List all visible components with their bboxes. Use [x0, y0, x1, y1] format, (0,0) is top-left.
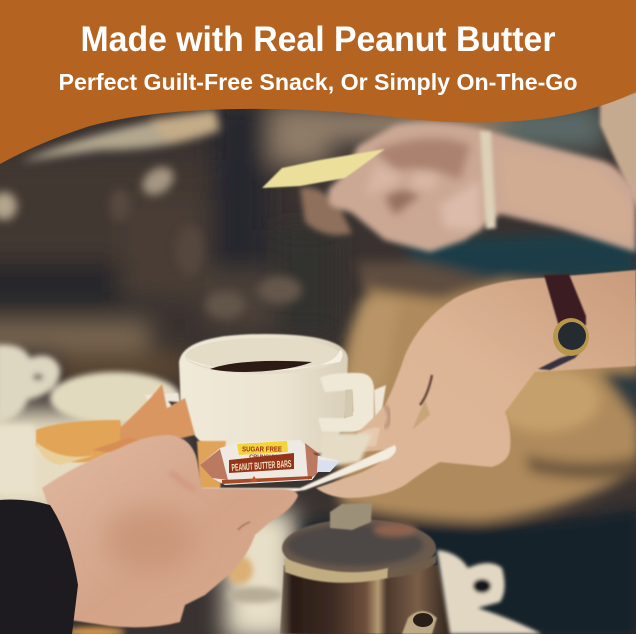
peanut butter bar wrapper — [200, 440, 340, 485]
label: sugar free — [237, 441, 288, 455]
teapot lid knob — [330, 503, 372, 530]
blurred lower table items — [65, 556, 283, 634]
wristwatch — [538, 274, 589, 370]
blurred plate, top left — [20, 110, 220, 162]
title: Made with Real Peanut Butter — [80, 20, 556, 59]
foreground hand — [42, 435, 298, 627]
pastries on plate — [36, 384, 226, 490]
teapot — [280, 503, 452, 634]
peanut butter bar wrapper: SUGAR FREE — [242, 444, 282, 454]
upper hand holding card — [262, 122, 636, 252]
saucer — [190, 445, 396, 496]
small cup behind teapot — [437, 550, 542, 634]
napkin tip — [374, 385, 386, 420]
orange wave banner — [0, 0, 636, 164]
thumbnail — [358, 428, 380, 447]
torso and apron — [300, 232, 636, 634]
label: peanut butter bars: PEANUT BUTTER BARS — [231, 459, 292, 474]
coffee — [210, 361, 312, 372]
subtitle: Perfect Guilt-Free Snack, Or Simply On-The-Go — [58, 69, 578, 95]
teapot spout — [402, 611, 437, 634]
bracelet — [480, 131, 496, 229]
cup handle — [318, 373, 374, 432]
coffee cup — [179, 334, 386, 453]
black sleeve — [0, 500, 78, 634]
upper right skin — [600, 90, 636, 215]
blurred bokeh lights — [0, 161, 302, 319]
label: crunchy: CRUNCHY — [249, 454, 277, 460]
yellow card — [262, 149, 385, 188]
serving hand and wrist — [316, 270, 636, 498]
blurred cups and plate, left — [0, 345, 180, 495]
